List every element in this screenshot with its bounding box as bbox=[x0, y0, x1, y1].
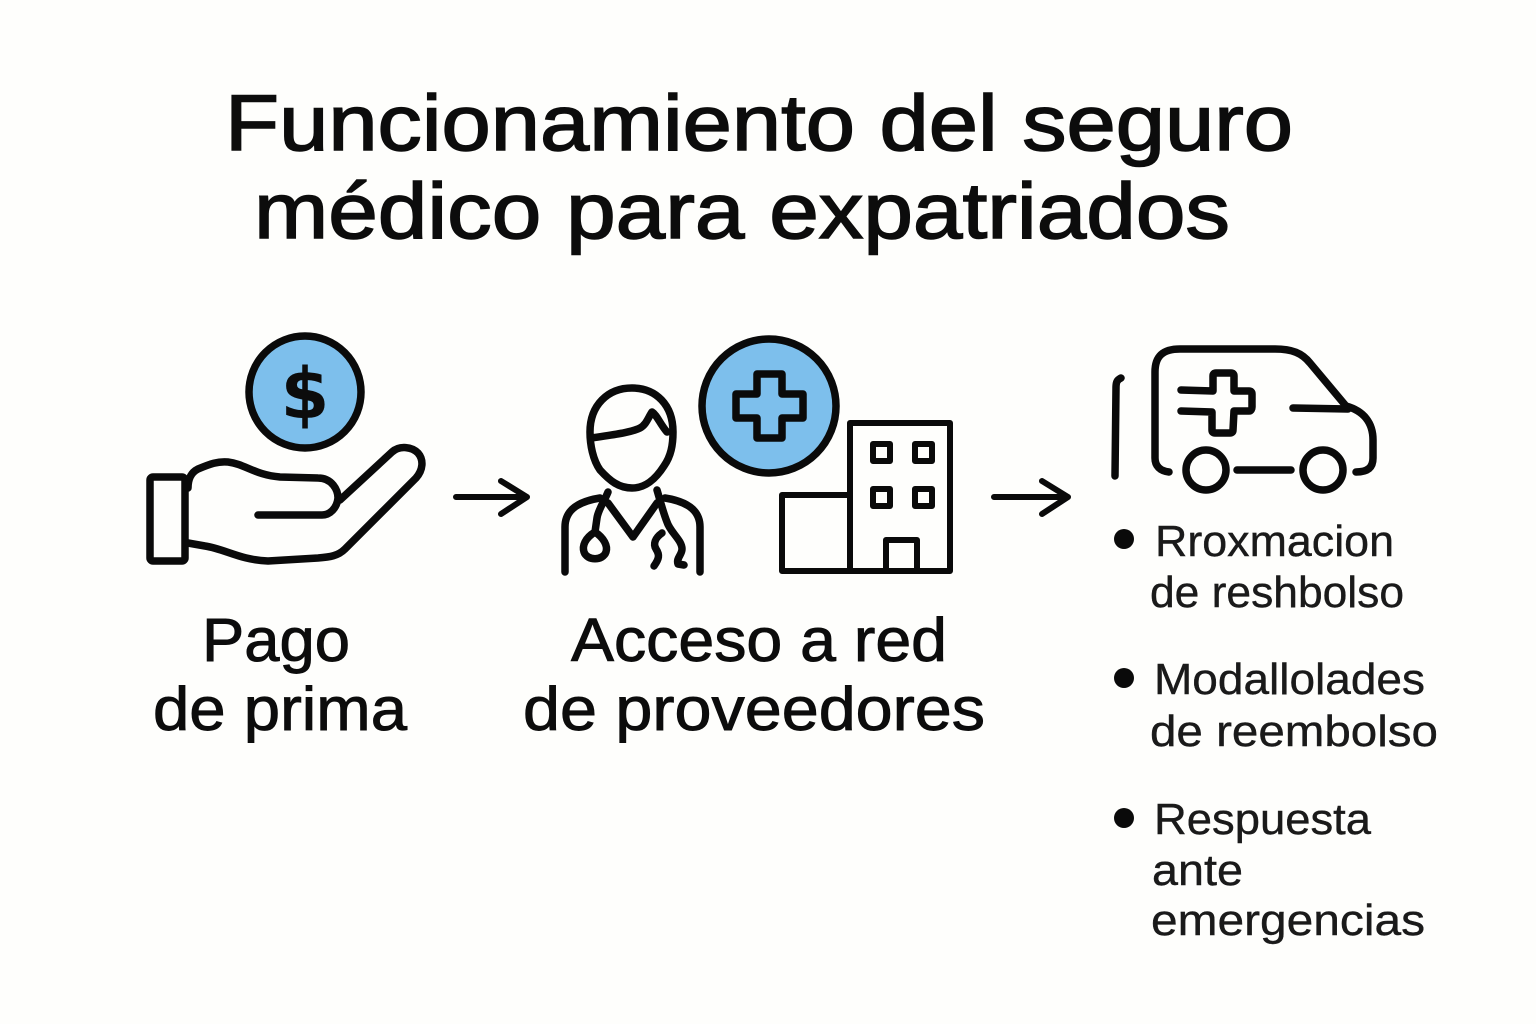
item 3: emergencias bbox=[1151, 896, 1425, 945]
label: acceso a red de proveedores bbox=[523, 606, 985, 743]
label: pago de prima: Pago bbox=[202, 606, 350, 674]
icon: hand holding coin bbox=[150, 336, 422, 561]
item 3: ante bbox=[1152, 846, 1243, 895]
item 2: de reembolso bbox=[1150, 707, 1438, 756]
hand bbox=[150, 448, 422, 561]
label: acceso a red de proveedores: de proveedores bbox=[523, 675, 985, 743]
item 2 bbox=[1114, 655, 1438, 756]
item 3 bbox=[1114, 795, 1425, 945]
item 1 bbox=[1114, 517, 1404, 617]
icon: medical cross badge bbox=[702, 339, 836, 473]
arrow 1 bbox=[456, 481, 527, 514]
title bbox=[225, 78, 1293, 255]
item 3: Respuesta bbox=[1154, 795, 1372, 844]
label: pago de prima bbox=[153, 606, 407, 743]
icon: ambulance bbox=[1115, 349, 1373, 490]
item 1: Rroxmacion bbox=[1155, 517, 1394, 566]
label: pago de prima: de prima bbox=[153, 675, 407, 743]
coin: $ bbox=[281, 353, 329, 435]
coin bbox=[249, 336, 361, 448]
stethoscope bbox=[583, 490, 684, 566]
arrow 2 bbox=[994, 481, 1068, 514]
item 2: Modallolades bbox=[1154, 655, 1425, 704]
icon: hospital building bbox=[782, 423, 950, 571]
title: Funcionamiento del seguro bbox=[225, 78, 1293, 167]
icon: doctor bbox=[565, 388, 700, 572]
label: acceso a red de proveedores: Acceso a red bbox=[571, 606, 947, 674]
title: médico para expatriados bbox=[254, 166, 1230, 255]
bullet list bbox=[1114, 517, 1438, 945]
item 1: de reshbolso bbox=[1150, 568, 1404, 617]
